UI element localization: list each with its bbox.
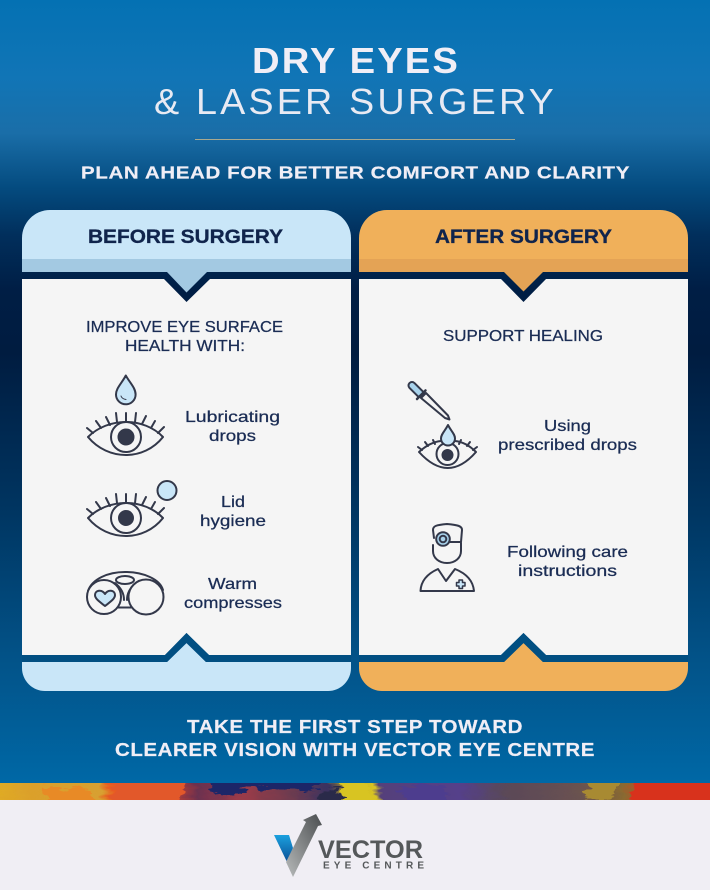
- after bottom band: [359, 633, 688, 662]
- label: using prescribed drops: prescribed drops: [498, 437, 637, 454]
- label: lubricating drops: drops: [209, 428, 256, 445]
- title: [154, 40, 557, 122]
- icon: doctor: [420, 524, 474, 591]
- panel: before surgery: [22, 210, 351, 691]
- panel: after surgery: [359, 210, 688, 691]
- subtitle: PLAN AHEAD FOR BETTER COMFORT AND CLARITY: [81, 162, 630, 182]
- after heading: AFTER SURGERY: [435, 226, 612, 248]
- after header shade: [359, 259, 688, 292]
- title: & LASER SURGERY: [154, 81, 557, 122]
- paint strip: [0, 783, 710, 800]
- call to action: CLEARER VISION WITH VECTOR EYE CENTRE: [115, 739, 595, 760]
- before footer: [22, 643, 351, 691]
- logo wordmark: VECTOR: [318, 836, 423, 864]
- icon: eye with lid hygiene pad: [87, 481, 176, 536]
- icon: warm compress case: [87, 572, 164, 614]
- label: following care instructions: instructions: [518, 563, 617, 580]
- label: using prescribed drops: [498, 418, 637, 454]
- icon: eye with drop: [87, 376, 164, 455]
- before header: [22, 210, 351, 272]
- label: lubricating drops: Lubricating: [185, 409, 280, 426]
- logo: vector eye centre: [274, 814, 424, 877]
- footer band: [0, 800, 710, 890]
- label: lid hygiene: [200, 494, 266, 530]
- before body: [22, 279, 351, 655]
- before header shade: [22, 259, 351, 292]
- label: following care instructions: Following care: [507, 544, 628, 561]
- icon: dropper and eye: [412, 386, 477, 468]
- after body: [359, 279, 688, 655]
- call to action: [115, 716, 595, 760]
- label: following care instructions: [507, 544, 628, 580]
- title: DRY EYES: [252, 40, 460, 81]
- logo mark: [274, 814, 322, 877]
- after subheading: SUPPORT HEALING: [443, 328, 603, 345]
- after header: [359, 210, 688, 272]
- label: lubricating drops: [185, 409, 280, 445]
- before subheading: [86, 319, 283, 355]
- before subheading: HEALTH WITH:: [125, 338, 245, 355]
- logo wordmark: EYE CENTRE: [323, 860, 424, 872]
- after footer: [359, 643, 688, 691]
- before heading: BEFORE SURGERY: [88, 226, 283, 248]
- call to action: TAKE THE FIRST STEP TOWARD: [187, 716, 523, 737]
- label: warm compresses: compresses: [184, 595, 282, 612]
- before bottom band: [22, 633, 351, 662]
- label: lid hygiene: Lid: [221, 494, 245, 511]
- before subheading: IMPROVE EYE SURFACE: [86, 319, 283, 336]
- label: warm compresses: Warm: [208, 576, 257, 593]
- label: lid hygiene: hygiene: [200, 513, 266, 530]
- label: warm compresses: [184, 576, 282, 612]
- label: using prescribed drops: Using: [544, 418, 591, 435]
